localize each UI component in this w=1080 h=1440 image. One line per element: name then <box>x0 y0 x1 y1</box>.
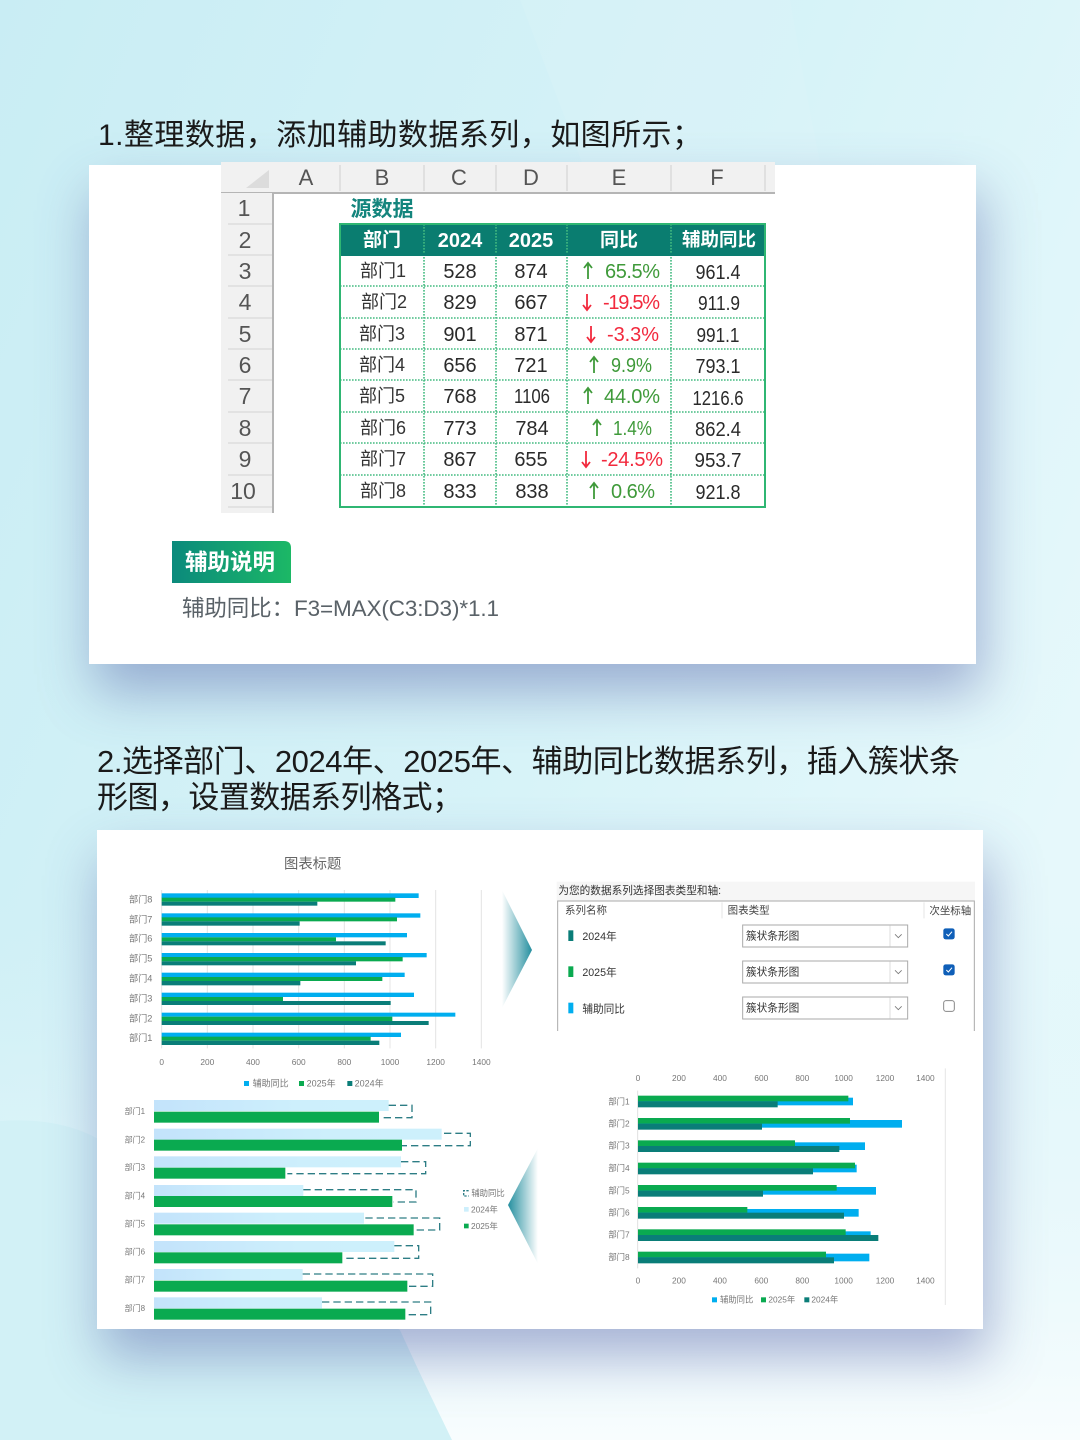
top axis <box>636 1073 935 1083</box>
column: departments <box>359 261 407 501</box>
top axis: 600 <box>754 1073 769 1083</box>
category labels: 部门3 <box>129 992 152 1003</box>
row: helper: 簇状条形图 <box>746 1001 799 1014</box>
badge: helper note: 辅助说明 <box>185 549 275 575</box>
legend: 辅助同比 <box>471 1188 505 1198</box>
row: 2025: 2025年 <box>582 966 617 979</box>
legend: 辅助同比 <box>253 1077 289 1088</box>
category labels: 部门2 <box>129 1012 152 1023</box>
column: 2025: 655 <box>514 449 548 471</box>
column: 2025 <box>514 261 550 503</box>
bottom axis: 1000 <box>834 1276 853 1286</box>
row header bar: 9 <box>239 446 251 472</box>
column: departments: 部门2 <box>361 292 407 312</box>
column: year-on-year change: 1.4% <box>613 418 652 440</box>
column: 2024: 901 <box>443 324 477 346</box>
category labels: 部门5 <box>125 1218 146 1228</box>
category labels: 部门2 <box>608 1118 630 1128</box>
column: helper values: 911.9 <box>698 293 740 315</box>
card: step 1 panel <box>89 165 976 664</box>
row header bar: 7 <box>239 383 251 409</box>
heading: step 2: 2.选择部门、2024年、2025年、辅助同比数据系列，插入簇状条 <box>97 744 960 779</box>
value axis: 800 <box>337 1057 352 1067</box>
column: departments: 部门5 <box>359 386 405 406</box>
column: 2025: 838 <box>515 481 549 503</box>
chart: final styled bars <box>125 1100 505 1320</box>
badge: helper note <box>172 541 291 583</box>
category labels <box>129 893 152 1043</box>
legend <box>464 1188 505 1231</box>
bottom axis: 400 <box>713 1276 727 1286</box>
bottom axis <box>636 1276 935 1286</box>
column: 2025: 871 <box>514 324 548 346</box>
column: departments: 部门6 <box>360 418 406 438</box>
table header row: 部门 <box>363 228 401 251</box>
column: departments: 部门7 <box>360 449 406 469</box>
top axis: 0 <box>636 1073 641 1083</box>
column: 2024: 833 <box>443 481 477 503</box>
helper dashed outlines <box>287 1105 470 1315</box>
category labels: 部门4 <box>608 1163 630 1173</box>
column: helper values: 793.1 <box>696 356 740 378</box>
chart title: 图表标题 <box>284 856 341 873</box>
legend: 2024年 <box>471 1204 498 1214</box>
category labels: 部门7 <box>129 913 152 924</box>
dialog: series chart types <box>557 882 975 1031</box>
category labels: 部门8 <box>125 1303 146 1313</box>
2025 green bars <box>154 1112 414 1320</box>
table header row <box>340 224 765 255</box>
legend: 辅助同比 <box>720 1294 753 1304</box>
column: 2024 <box>443 261 477 503</box>
column: year-on-year change: 0.6% <box>611 481 655 503</box>
legend: 2024年 <box>811 1294 838 1304</box>
column: 2024: 656 <box>443 355 477 377</box>
column: year-on-year change: -19.5% <box>603 292 660 314</box>
column: year-on-year change: -24.5% <box>601 449 663 471</box>
column header bar: A <box>299 165 314 190</box>
value axis: 0 <box>159 1057 164 1067</box>
row header bar: 3 <box>239 258 251 284</box>
column: departments: 部门1 <box>360 261 406 281</box>
category labels: 部门6 <box>608 1208 630 1218</box>
data table <box>340 224 765 507</box>
column header bar: C <box>451 165 467 190</box>
value axis: 200 <box>200 1057 215 1067</box>
column: 2025: 874 <box>514 261 548 283</box>
category labels: 部门7 <box>608 1230 630 1240</box>
category labels <box>608 1096 630 1262</box>
column header bar: F <box>710 165 724 190</box>
bars <box>162 893 455 1045</box>
column: helper values <box>692 262 744 504</box>
row: 2024: 簇状条形图 <box>746 929 799 942</box>
category labels: 部门4 <box>129 972 152 983</box>
value axis: 1000 <box>381 1057 400 1067</box>
column: 2024: 773 <box>443 418 477 440</box>
value axis: 1200 <box>426 1057 445 1067</box>
table header row: 同比 <box>600 229 638 251</box>
table header row: 2024 <box>438 230 483 252</box>
row header bar: 8 <box>239 415 251 441</box>
column: departments: 部门4 <box>359 355 405 375</box>
column: year-on-year change: 9.9% <box>611 355 652 377</box>
row: 2024: 2024年 <box>582 930 617 943</box>
column: 2024: 528 <box>443 261 477 283</box>
chart: secondary axis bars <box>608 1068 945 1305</box>
column: helper values: 953.7 <box>694 450 742 472</box>
dialog: series chart types: 为您的数据系列选择图表类型和轴: <box>558 884 721 897</box>
category labels: 部门8 <box>129 893 152 904</box>
value axis <box>159 1057 491 1067</box>
category labels: 部门2 <box>125 1134 146 1144</box>
category labels: 部门6 <box>129 933 152 944</box>
column: 2024: 867 <box>443 449 477 471</box>
value axis: 600 <box>292 1057 306 1067</box>
row: 2025 <box>568 961 955 983</box>
row header bar <box>221 192 274 513</box>
row header bar: 4 <box>239 289 252 315</box>
spreadsheet <box>221 162 775 513</box>
top axis: 400 <box>713 1073 727 1083</box>
column: year-on-year change: 44.0% <box>604 386 660 408</box>
legend: 2025年 <box>307 1077 336 1088</box>
arrow: to final chart <box>508 1148 538 1264</box>
2024 light bars <box>154 1100 442 1308</box>
column: year-on-year change <box>582 261 663 503</box>
column header bar <box>221 162 775 194</box>
category labels: 部门3 <box>608 1141 630 1151</box>
row header bar: 10 <box>230 478 256 504</box>
column: departments: 部门8 <box>360 481 406 501</box>
column: 2024: 829 <box>443 292 477 314</box>
bottom axis: 600 <box>754 1276 769 1286</box>
bottom axis: 1400 <box>916 1276 935 1286</box>
dialog: series chart types: 系列名称 <box>565 903 607 916</box>
dialog: series chart types: 图表类型 <box>728 903 770 916</box>
top axis: 800 <box>795 1073 810 1083</box>
category labels: 部门6 <box>125 1247 146 1257</box>
row header bar: 5 <box>239 321 251 347</box>
bottom axis: 200 <box>672 1276 686 1286</box>
legend: 2025年 <box>768 1294 795 1304</box>
row header bar: 2 <box>239 227 251 253</box>
category labels: 部门5 <box>129 953 152 964</box>
bottom axis: 0 <box>636 1276 641 1286</box>
category labels: 部门8 <box>608 1252 630 1262</box>
table title: 源数据 <box>350 198 414 221</box>
row: 2025: 簇状条形图 <box>746 965 799 978</box>
column: 2025: 1106 <box>514 386 550 408</box>
table header row: 2025 <box>509 230 553 252</box>
row header bar: 6 <box>239 352 251 378</box>
value axis: 400 <box>246 1057 260 1067</box>
column header bar: D <box>523 165 539 190</box>
heading: step 2 <box>97 744 960 815</box>
row header bar: 1 <box>238 195 250 221</box>
top axis: 1000 <box>834 1073 853 1083</box>
column: helper values: 862.4 <box>695 419 741 441</box>
dialog: series chart types: 次坐标轴 <box>929 904 971 917</box>
legend <box>244 1077 384 1088</box>
category labels: 部门1 <box>608 1096 630 1106</box>
column: helper values: 1216.6 <box>692 388 744 410</box>
top axis: 1200 <box>876 1073 895 1083</box>
card: step 2 panel <box>97 830 983 1329</box>
category labels: 部门5 <box>608 1185 630 1195</box>
top axis: 1400 <box>916 1073 935 1083</box>
heading: step 2: 形图，设置数据系列格式； <box>97 780 463 815</box>
column: 2025: 721 <box>514 355 548 377</box>
column: helper values: 921.8 <box>696 482 740 504</box>
column header bar: E <box>612 165 626 190</box>
column: 2025: 784 <box>515 418 549 440</box>
heading: step 1: 1.整理数据，添加辅助数据系列，如图所示； <box>98 119 702 152</box>
row: helper: 辅助同比 <box>582 1002 625 1015</box>
bottom axis: 1200 <box>876 1276 895 1286</box>
row: helper <box>568 997 954 1019</box>
chart: original clustered bar <box>129 856 491 1088</box>
legend <box>712 1294 838 1304</box>
column: helper values: 961.4 <box>696 262 740 284</box>
category labels: 部门4 <box>125 1191 146 1201</box>
value axis: 1400 <box>472 1057 491 1067</box>
legend: 2024年 <box>355 1077 384 1088</box>
arrow: to dialog <box>502 890 532 1008</box>
column: year-on-year change: 65.5% <box>605 261 660 283</box>
column: departments: 部门3 <box>359 324 405 344</box>
column: year-on-year change: -3.3% <box>607 324 659 346</box>
top axis: 200 <box>672 1073 686 1083</box>
category labels: 部门3 <box>125 1162 146 1172</box>
row: 2024 <box>568 925 955 947</box>
column: 2025: 667 <box>514 292 548 314</box>
category labels: 部门1 <box>129 1032 152 1043</box>
table header row: 辅助同比 <box>682 229 756 250</box>
category labels <box>125 1106 146 1313</box>
category labels: 部门7 <box>125 1274 146 1284</box>
column: 2024: 768 <box>443 386 477 408</box>
column header bar: B <box>375 165 389 190</box>
bars <box>638 1096 902 1263</box>
helper formula: 辅助同比：F3=MAX(C3:D3)*1.1 <box>182 596 499 621</box>
column: helper values: 991.1 <box>696 325 740 347</box>
bottom axis: 800 <box>795 1276 810 1286</box>
category labels: 部门1 <box>125 1106 146 1116</box>
legend: 2025年 <box>471 1221 498 1231</box>
